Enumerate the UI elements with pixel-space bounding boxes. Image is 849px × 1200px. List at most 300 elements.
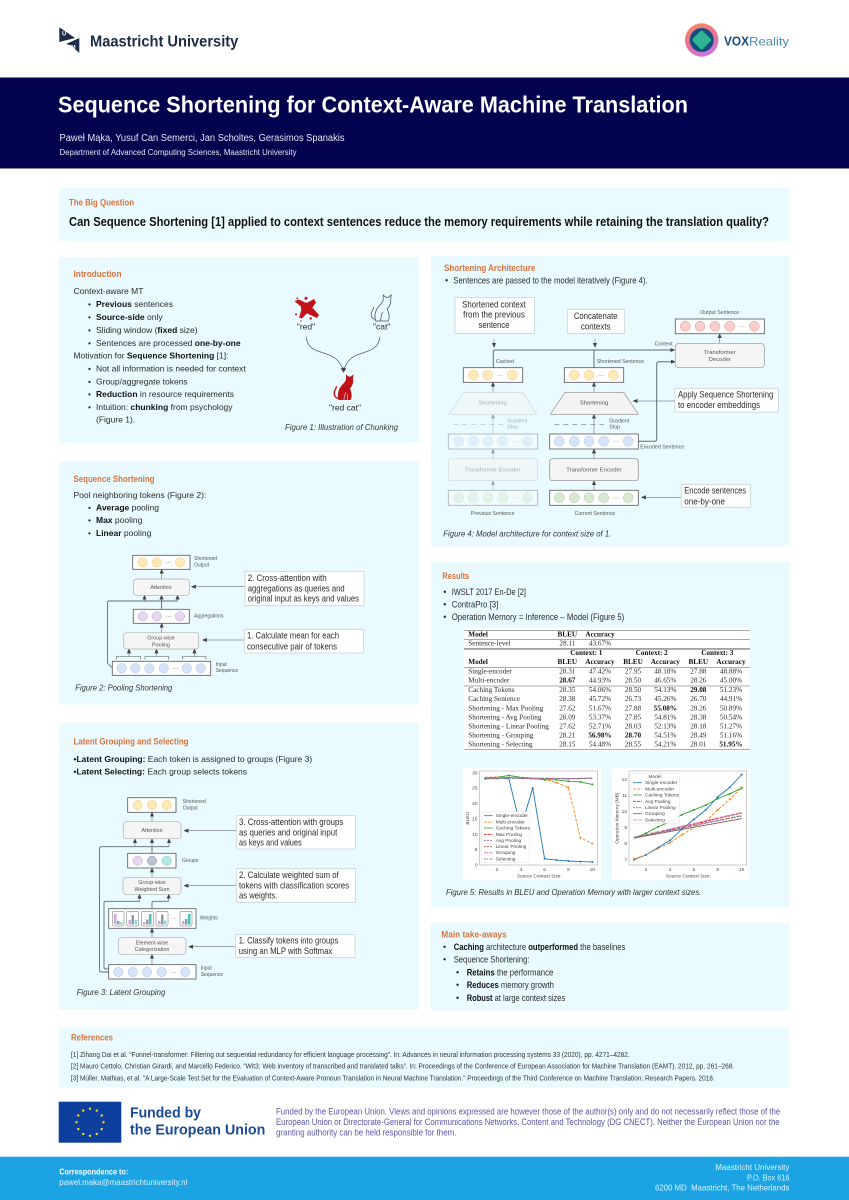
callout: shortened context: from the previous [463, 310, 525, 320]
results table: 53.37% [589, 713, 611, 721]
callout: cross-attention with groups: as keys and values [239, 837, 302, 847]
chart: BLEU vs source context size: 10 [472, 832, 478, 838]
introduction text: • [88, 376, 91, 386]
results table: 48.88% [720, 667, 742, 675]
results table: Accuracy [716, 658, 746, 666]
logo: VOX Reality: Reality [749, 35, 789, 49]
chart: BLEU vs source context size: 0 [475, 863, 478, 869]
figure 3: latent grouping diagram: Group-wise [138, 880, 166, 886]
latent grouping text: •Latent Selecting: Each group selects tokens [74, 767, 247, 777]
correspondence: Correspondence to: [59, 1167, 128, 1177]
legend: Linear Pooling [645, 805, 676, 811]
figure 4: architecture diagram: ··· [497, 373, 503, 379]
introduction text: Previous sentences [96, 299, 173, 309]
introduction text: • [88, 338, 91, 348]
chart: BLEU vs source context size: 4 [519, 867, 522, 873]
reference list: [3] Müller, Mathias, et al. "A Large-Scale Test Set for the Evaluation of Context-Aware Pronoun Translation in Neural Machine Translation." Proceedings of the Third Conference on Machine Translation: Research Papers. 2018. [71, 1075, 715, 1082]
heading: latent grouping: Latent Grouping and Selecting [74, 736, 188, 746]
results table: Sentence-level [468, 640, 511, 648]
legend: Caching Tokens [645, 792, 680, 798]
chart: BLEU vs source context size: 5 [475, 847, 478, 853]
callout: concatenate contexts [567, 309, 625, 333]
results table: 28.70 [625, 731, 641, 739]
figure 4: architecture diagram: Output Sentence [700, 310, 739, 316]
figure 2: pooling diagram: Input [216, 662, 227, 668]
legend [631, 773, 680, 824]
figure 4: architecture diagram: Context [655, 342, 673, 348]
results table: 28.11 [559, 640, 576, 648]
results table: 27.95 [625, 667, 641, 675]
callout: classify tokens: 1. Classify tokens into groups [239, 936, 339, 946]
arrow: shortened context [493, 339, 495, 347]
introduction text: Motivation for Sequence Shortening [1]: [74, 350, 228, 360]
address [655, 1162, 790, 1193]
panel: introduction [59, 257, 419, 443]
callout: shortened context: sentence [478, 320, 510, 330]
results table: Model [468, 630, 488, 638]
results table: 51.67% [589, 704, 611, 712]
panel: results [431, 562, 790, 908]
results table: 50.54% [720, 713, 742, 721]
callout: weighted sum: tokens with classification scores [239, 880, 349, 890]
results table: Single-encoder [468, 667, 512, 675]
legend: Max Pooling [496, 832, 522, 838]
callout: shortened context [455, 298, 534, 333]
icon: red cat [334, 374, 354, 400]
results table: 28.50 [625, 677, 641, 685]
results table: Accuracy [651, 658, 680, 666]
take-away list: • [456, 980, 459, 990]
results table: 55.08% [654, 704, 677, 712]
results table: 27.88 [625, 704, 641, 712]
callout: shortened context: Shortened context [462, 299, 526, 309]
results bullets: Operation Memory = Inference – Model (Figure 5) [452, 612, 624, 622]
results table: Shortening - Avg Pooling [468, 713, 542, 721]
introduction text: • [88, 389, 91, 399]
results table: 28.38 [559, 695, 576, 703]
results table: 54.51% [654, 731, 676, 739]
results table: 28.03 [625, 722, 641, 730]
callout: concatenate contexts: Concatenate [574, 311, 618, 321]
chart: BLEU vs source context size: 10 [590, 867, 595, 873]
results table: 27.62 [559, 704, 576, 712]
results bullets: • [443, 587, 446, 597]
legend: Grouping [645, 811, 665, 817]
arrow: callout 1 [189, 946, 236, 948]
disclaimer text: granting authority can be held responsible for them. [276, 1127, 456, 1137]
footer [0, 1157, 849, 1200]
figure 4: architecture diagram: Previous Sentence [471, 511, 515, 517]
results table: Model [468, 658, 488, 666]
results table: 45.00% [720, 677, 742, 685]
results table: Caching Sentence [468, 695, 520, 703]
results bullets: • [443, 599, 446, 609]
chart: BLEU vs source context size: 8 [567, 867, 570, 873]
reference list [71, 1052, 734, 1082]
panel: the big question [59, 188, 790, 241]
icon: red splat [294, 297, 319, 322]
results table: Context: 1 [570, 649, 603, 657]
results table: 28.18 [690, 722, 707, 730]
figure 2: pooling diagram: ··· [165, 560, 171, 566]
icon: weight histograms [112, 911, 192, 926]
affiliation: Department of Advanced Computing Sciences, Maastricht University [60, 148, 296, 157]
take-away list: • [456, 993, 459, 1003]
legend: Caching Tokens [496, 826, 530, 832]
figure 3: latent grouping diagram: Input [201, 966, 212, 972]
figure 4: architecture diagram: Shortening [580, 401, 608, 407]
results table: 47.42% [589, 667, 611, 675]
funded by the European Union text: the European Union [130, 1122, 265, 1138]
figure 3: latent grouping diagram: Categorization [135, 947, 169, 953]
introduction text [74, 286, 246, 424]
figure 2: pooling diagram: Output [194, 563, 210, 569]
introduction text: Context-aware MT [74, 286, 143, 296]
legend: Avg Pooling [645, 799, 671, 805]
callout: calculate mean [244, 629, 364, 653]
figure 4: architecture diagram: Gradient [609, 419, 630, 425]
icon: EU flag [59, 1102, 121, 1143]
figure 4: architecture diagram: Current Sentence [575, 511, 615, 517]
data lines [633, 774, 743, 861]
caption: figure 2: Figure 2: Pooling Shortening [75, 683, 173, 693]
results table: 27.85 [625, 713, 641, 721]
results table: 54.21% [654, 741, 676, 749]
previous sentence stack (faded): ··· [512, 496, 518, 502]
introduction text: • [88, 299, 91, 309]
figure 3: latent grouping diagram [100, 798, 356, 979]
chart: operation memory vs source context size: 10 [622, 809, 627, 815]
introduction text: (Figure 1). [96, 414, 135, 424]
callout: classify tokens [236, 935, 355, 958]
panel: references [59, 1027, 790, 1088]
callout: encode sentences [681, 484, 750, 507]
address: 6200 MD Maastricht, The Netherlands [655, 1183, 789, 1193]
take-away list: • [443, 942, 446, 952]
chart: BLEU vs source context size: Source Context Size [517, 873, 561, 879]
introduction text: • [88, 312, 91, 322]
icon: cat outline [371, 295, 391, 321]
logo: Maastricht University: M [71, 45, 76, 51]
introduction text: Reduction in resource requirements [96, 389, 234, 399]
icon: weight histograms: ··· [171, 916, 177, 922]
sequence shortening text: Pool neighboring tokens (Figure 2): [74, 490, 206, 500]
results table: BLEU [623, 658, 644, 666]
results table: 46.65% [654, 677, 676, 685]
latent grouping text: •Latent Grouping: Each token is assigned to groups (Figure 3) [74, 754, 312, 764]
latent grouping text [74, 754, 312, 777]
legend: Selecting [645, 818, 665, 824]
figure 4: architecture diagram [448, 298, 778, 517]
legend [482, 812, 530, 863]
results table: 28.67 [559, 677, 576, 685]
callout: apply sequence shortening: to encoder embeddings [678, 400, 760, 410]
previous sentence stack (faded): ··· [512, 439, 518, 445]
caption: figure 4: Figure 4: Model architecture for context size of 1. [443, 529, 611, 539]
label: red cat: "red cat" [329, 403, 361, 413]
figure 4: architecture diagram: Transformer [704, 350, 736, 356]
callout: cross-attention: 2. Cross-attention with [248, 573, 327, 583]
panel: sequence shortening [59, 462, 419, 704]
chart: BLEU vs source context size: BLEU [465, 811, 471, 825]
chart: BLEU vs source context size: 15 [472, 816, 478, 822]
figure 2: pooling diagram: Pooling [152, 642, 170, 648]
results table: Shortening - Selecting [468, 741, 533, 749]
figure 2: pooling diagram: Sequence [216, 668, 238, 674]
heading: introduction: Introduction [74, 269, 122, 279]
take-away list: Caching architecture outperformed the baselines [454, 942, 626, 952]
results table: 44.93% [589, 677, 611, 685]
results table: 45.26% [654, 695, 676, 703]
figure 4: architecture diagram: ··· [598, 373, 604, 379]
results table: 26.73 [625, 695, 641, 703]
architecture bullet: Sentences are passed to the model iteratively (Figure 4). [453, 276, 648, 286]
heading: results: Results [442, 571, 469, 581]
figure 3: latent grouping diagram: Output [183, 805, 198, 811]
callout: calculate mean: consecutive pair of tokens [247, 641, 337, 651]
results table: 45.72% [589, 695, 611, 703]
caption: figure 3: Figure 3: Latent Grouping [77, 987, 166, 997]
results table: 52.13% [654, 722, 676, 730]
introduction text: • [88, 364, 91, 374]
heading: the big question: The Big Question [69, 198, 134, 208]
chart: operation memory vs source context size: 12 [622, 777, 627, 783]
results bullets: • [443, 612, 446, 622]
results table: 28.55 [625, 741, 641, 749]
results table: 51.16% [720, 731, 742, 739]
take-away list [443, 942, 626, 1003]
chart: BLEU vs source context size [463, 768, 601, 880]
callout: apply sequence shortening: Apply Sequence Shortening [678, 390, 773, 400]
results table: Shortening - Linear Pooling [468, 722, 549, 730]
results table [464, 628, 750, 751]
take-away list: Sequence Shortening: [454, 955, 530, 965]
take-away list: Reduces memory growth [467, 980, 554, 990]
figure 3: latent grouping diagram: Groups [182, 858, 199, 864]
previous sentence stack (faded) [448, 392, 538, 505]
callout: encode sentences: Encode sentences [684, 486, 746, 496]
panel: main take-aways [430, 923, 790, 1010]
callout: weighted sum: 2. Calculate weighted sum of [239, 870, 339, 880]
previous sentence stack (faded): Gradient [507, 419, 528, 425]
results table: 27.88 [690, 667, 707, 675]
results bullets [443, 587, 624, 622]
introduction text: Group/aggregate tokens [96, 376, 188, 386]
reference list: [2] Mauro Cettolo, Christian Girardi, and Marcello Federico. “Wit3: Web inventory of transcribed and translated talks”. In: Proceedings of the Conference of European Association for Machine Translation (EAMT). 2012, pp. 261–268. [71, 1064, 734, 1071]
sequence shortening text [74, 490, 206, 538]
callout: cross-attention [245, 571, 364, 606]
label: red: "red" [297, 321, 315, 331]
results table: 28.38 [690, 713, 707, 721]
sequence shortening text: Linear pooling [96, 528, 152, 538]
figure 4: architecture diagram: ··· [613, 496, 619, 502]
figure 4: architecture diagram: Stop [609, 425, 620, 431]
figure 2: pooling diagram: Group-wise [147, 635, 175, 641]
results table: 28.01 [690, 741, 707, 749]
introduction text: Source-side only [96, 312, 163, 322]
funded by the European Union text: Funded by [130, 1106, 202, 1122]
figure 2: pooling diagram: ··· [172, 666, 178, 672]
chart: operation memory vs source context size: Operation Memory [MB] [614, 793, 620, 844]
chart: operation memory vs source context size: 2 [645, 867, 648, 873]
callout: classify tokens: using an MLP with Softmax [239, 946, 333, 956]
figure 2: pooling diagram: Aggregations [194, 614, 224, 620]
sequence shortening text: • [88, 515, 91, 525]
address: Maastricht University [715, 1162, 790, 1172]
figure 3: latent grouping diagram: Attention [141, 828, 163, 834]
title: Sequence Shortening for Context-Aware Machine Translation [58, 92, 688, 118]
results table: 54.13% [654, 686, 676, 694]
figure 2: pooling diagram [108, 555, 364, 675]
chart: operation memory vs source context size: 10 [739, 867, 745, 873]
results table: Context: 3 [701, 649, 734, 657]
disclaimer text: Funded by the European Union. Views and opinions expressed are however those of the author(s) only and do not necessarily reflect those of the [276, 1107, 780, 1117]
sequence shortening text: Average pooling [96, 502, 159, 512]
introduction text: Not all information is needed for context [96, 364, 246, 374]
chart: BLEU vs source context size: 25 [472, 786, 478, 792]
results table: 54.06% [589, 686, 611, 694]
heading: sequence shortening: Sequence Shortening [74, 474, 154, 484]
legend: Multi-encoder [645, 786, 674, 792]
callout: weighted sum: as weights. [239, 890, 277, 900]
arrows: merging curves [306, 337, 380, 372]
arrow: callout 3 [184, 830, 236, 832]
correspondence: pawel.maka@maastrichtuniversity.nl [59, 1177, 187, 1187]
results table: 28.31 [559, 667, 576, 675]
chart: BLEU vs source context size: 20 [472, 801, 478, 807]
legend: Multi-encoder [496, 820, 525, 826]
legend: Single-encoder [496, 813, 528, 819]
results table: 29.08 [690, 686, 707, 694]
panel: latent grouping and selecting [59, 723, 419, 1010]
figure 4: architecture diagram: ··· [739, 324, 745, 330]
label: cat: "cat" [373, 321, 390, 331]
results table: 56.98% [588, 731, 612, 739]
results table: Caching Tokens [468, 686, 515, 694]
legend: Selecting [496, 856, 516, 862]
results table: 26.70 [690, 695, 707, 703]
figure 2: pooling diagram: ··· [165, 614, 171, 620]
take-away list: Retains the performance [467, 967, 553, 977]
legend: Model [648, 774, 662, 780]
results table: 48.18% [654, 667, 676, 675]
reference list: [1] Zihang Dai et al. “Funnel-transformer: Filtering out sequential redundancy for efficient language processing”. In: Advances in neural information processing systems 33 (2020), pp. 4271–4282. [71, 1052, 630, 1059]
arrow: callout 2 [184, 885, 236, 887]
figure 3: latent grouping diagram: Weighted Sum [134, 887, 170, 893]
callout: cross-attention with groups: as queries and original input [239, 827, 338, 837]
figure 2: pooling diagram: Attention [150, 585, 172, 591]
chart: operation memory vs source context size: 9 [624, 825, 627, 831]
results table: 28.21 [559, 731, 576, 739]
chart: operation memory vs source context size: 8 [716, 867, 719, 873]
logo: Maastricht University: U [62, 32, 66, 38]
chart: operation memory vs source context size: Source Context Size [666, 873, 710, 879]
callout: cross-attention with groups: 3. Cross-attention with groups [239, 817, 344, 827]
figure 2: pooling diagram: Shortened [194, 556, 217, 562]
authors: Paweł Mąka, Yusuf Can Semerci, Jan Scholtes, Gerasimos Spanakis [60, 133, 344, 144]
results table: 54.81% [654, 713, 676, 721]
results bullets: IWSLT 2017 En-De [2] [452, 587, 526, 597]
sequence shortening text: • [88, 502, 91, 512]
results table: 28.26 [690, 677, 707, 685]
previous sentence stack (faded): Stop [507, 425, 518, 431]
figure 4: architecture diagram: Shortened Sentence [597, 359, 644, 365]
callout: cross-attention: aggregations as queries and [248, 583, 345, 593]
chart: BLEU vs source context size: 30 [472, 770, 478, 776]
funded by the European Union text [130, 1106, 265, 1138]
arrow: callout 1 [203, 639, 244, 641]
callout: encode sentences: one-by-one [684, 496, 725, 506]
caption: figure 1: Figure 1: Illustration of Chunking [285, 422, 398, 432]
panel: shortening architecture [431, 256, 790, 546]
sequence shortening text: • [88, 528, 91, 538]
results table: 43.67% [589, 640, 611, 648]
figure 1: chunking illustration [285, 295, 398, 432]
figure 3: latent grouping diagram: Shortened [183, 799, 206, 805]
legend: Linear Pooling [496, 844, 527, 850]
results table: 51.27% [720, 722, 742, 730]
introduction text: Intuition: chunking from psychology [96, 402, 233, 412]
results bullets: ContraPro [3] [452, 599, 498, 609]
sequence shortening text: Max pooling [96, 515, 143, 525]
results table: Shortening - Grouping [468, 731, 534, 739]
results table: 51.23% [720, 686, 742, 694]
arrow: concatenate contexts [594, 339, 596, 347]
callout: calculate mean: 1. Calculate mean for each [247, 631, 339, 641]
figure 3: latent grouping diagram: Sequence [201, 972, 223, 978]
heading: main take-aways: Main take-aways [441, 929, 507, 939]
logo: Maastricht University: Maastricht University [90, 33, 239, 50]
figure 4: architecture diagram: Encoded Sentence [640, 445, 684, 451]
callout: cross-attention: original input as keys and values [248, 594, 359, 604]
results table: 28.26 [690, 704, 707, 712]
disclaimer text: European Union or Directorate-General for Communications Networks, Content and Technology (DG CNECT). Neither the European Union nor the [276, 1117, 780, 1127]
results table: Accuracy [585, 630, 615, 638]
arrow: encode sentences [642, 496, 681, 498]
results table: Multi-encoder [468, 677, 510, 685]
legend: Single-encoder [645, 780, 678, 786]
arrow: callout 2 [192, 586, 245, 588]
results table: 51.95% [719, 741, 743, 749]
header banner [0, 78, 849, 168]
architecture bullet: • [445, 276, 448, 286]
figure 4: architecture diagram: Cached [496, 359, 514, 365]
figure 4: architecture diagram: Transformer Encoder [566, 468, 622, 474]
heading: shortening architecture: Shortening Architecture [444, 263, 535, 273]
logo: VOX Reality [685, 23, 789, 57]
callout: cross-attention with groups [236, 816, 356, 849]
results table: 28.50 [625, 686, 641, 694]
chart: operation memory vs source context size: 4 [669, 867, 672, 873]
caption: figure 5: Figure 5: Results in BLEU and Operation Memory with larger context sizes. [446, 887, 701, 897]
chart: operation memory vs source context size: 6 [692, 867, 695, 873]
figure 3: latent grouping diagram: Element-wise [136, 940, 168, 946]
results table: 44.91% [720, 695, 742, 703]
figure 3: latent grouping diagram: ··· [170, 970, 176, 976]
figure 4: architecture diagram: ··· [613, 439, 619, 445]
callout: apply sequence shortening [675, 388, 778, 412]
chart: operation memory vs source context size: 7 [624, 857, 627, 863]
results table: BLEU [689, 658, 709, 666]
results table: 52.71% [589, 722, 611, 730]
logo: Maastricht University [59, 27, 239, 53]
results table: 50.89% [720, 704, 742, 712]
arrow: apply sequence shortening [633, 400, 675, 402]
introduction text: • [88, 402, 91, 412]
results table: 27.62 [559, 722, 576, 730]
results table: Accuracy [585, 658, 615, 666]
results table: 28.15 [559, 741, 576, 749]
